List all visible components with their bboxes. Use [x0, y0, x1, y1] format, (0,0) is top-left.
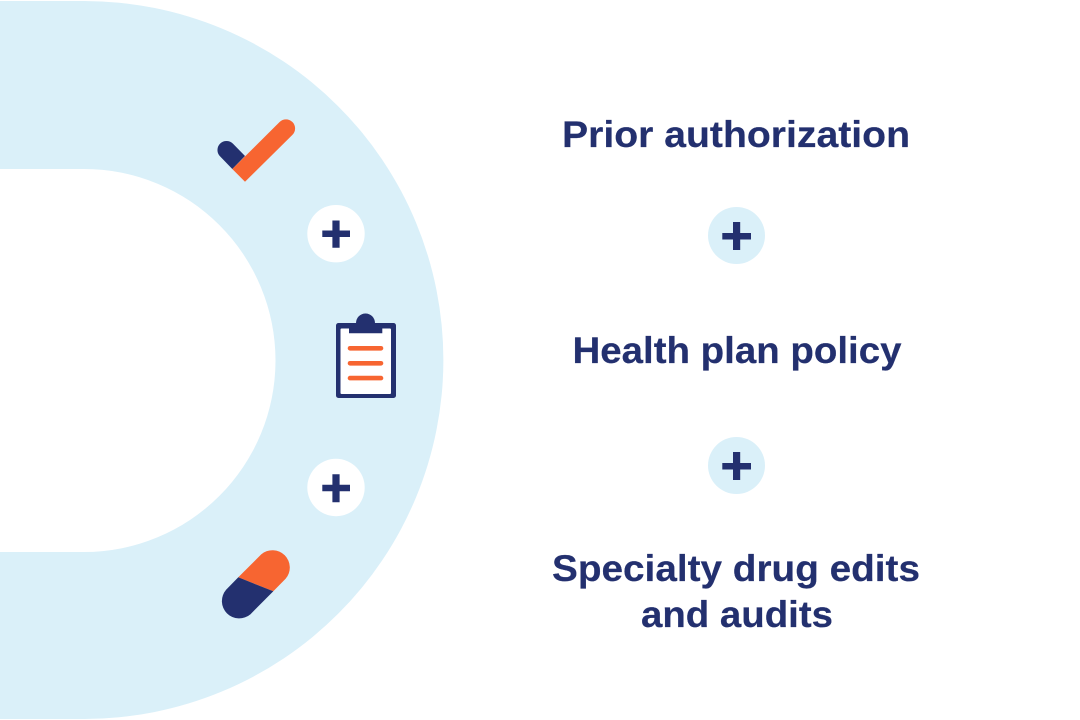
icon: checkmark — [217, 119, 295, 182]
plus badge, right upper — [708, 207, 765, 264]
icon: clipboard — [336, 314, 396, 398]
plus badge on arc, upper — [307, 205, 365, 262]
plus badge, right lower — [708, 437, 765, 494]
icon: pill capsule — [222, 550, 290, 618]
heading: Prior authorization: Prior authorization — [562, 114, 910, 155]
heading: Health plan policy: Health plan policy — [572, 330, 902, 371]
heading: Specialty drug edits and audits — [552, 548, 920, 635]
heading: Specialty drug edits and audits: Specialty drug edits — [552, 548, 920, 589]
heading: Specialty drug edits and audits: and audits — [641, 594, 833, 635]
plus badge on arc, lower — [307, 459, 365, 516]
light blue D-shaped arc band — [0, 1, 443, 719]
